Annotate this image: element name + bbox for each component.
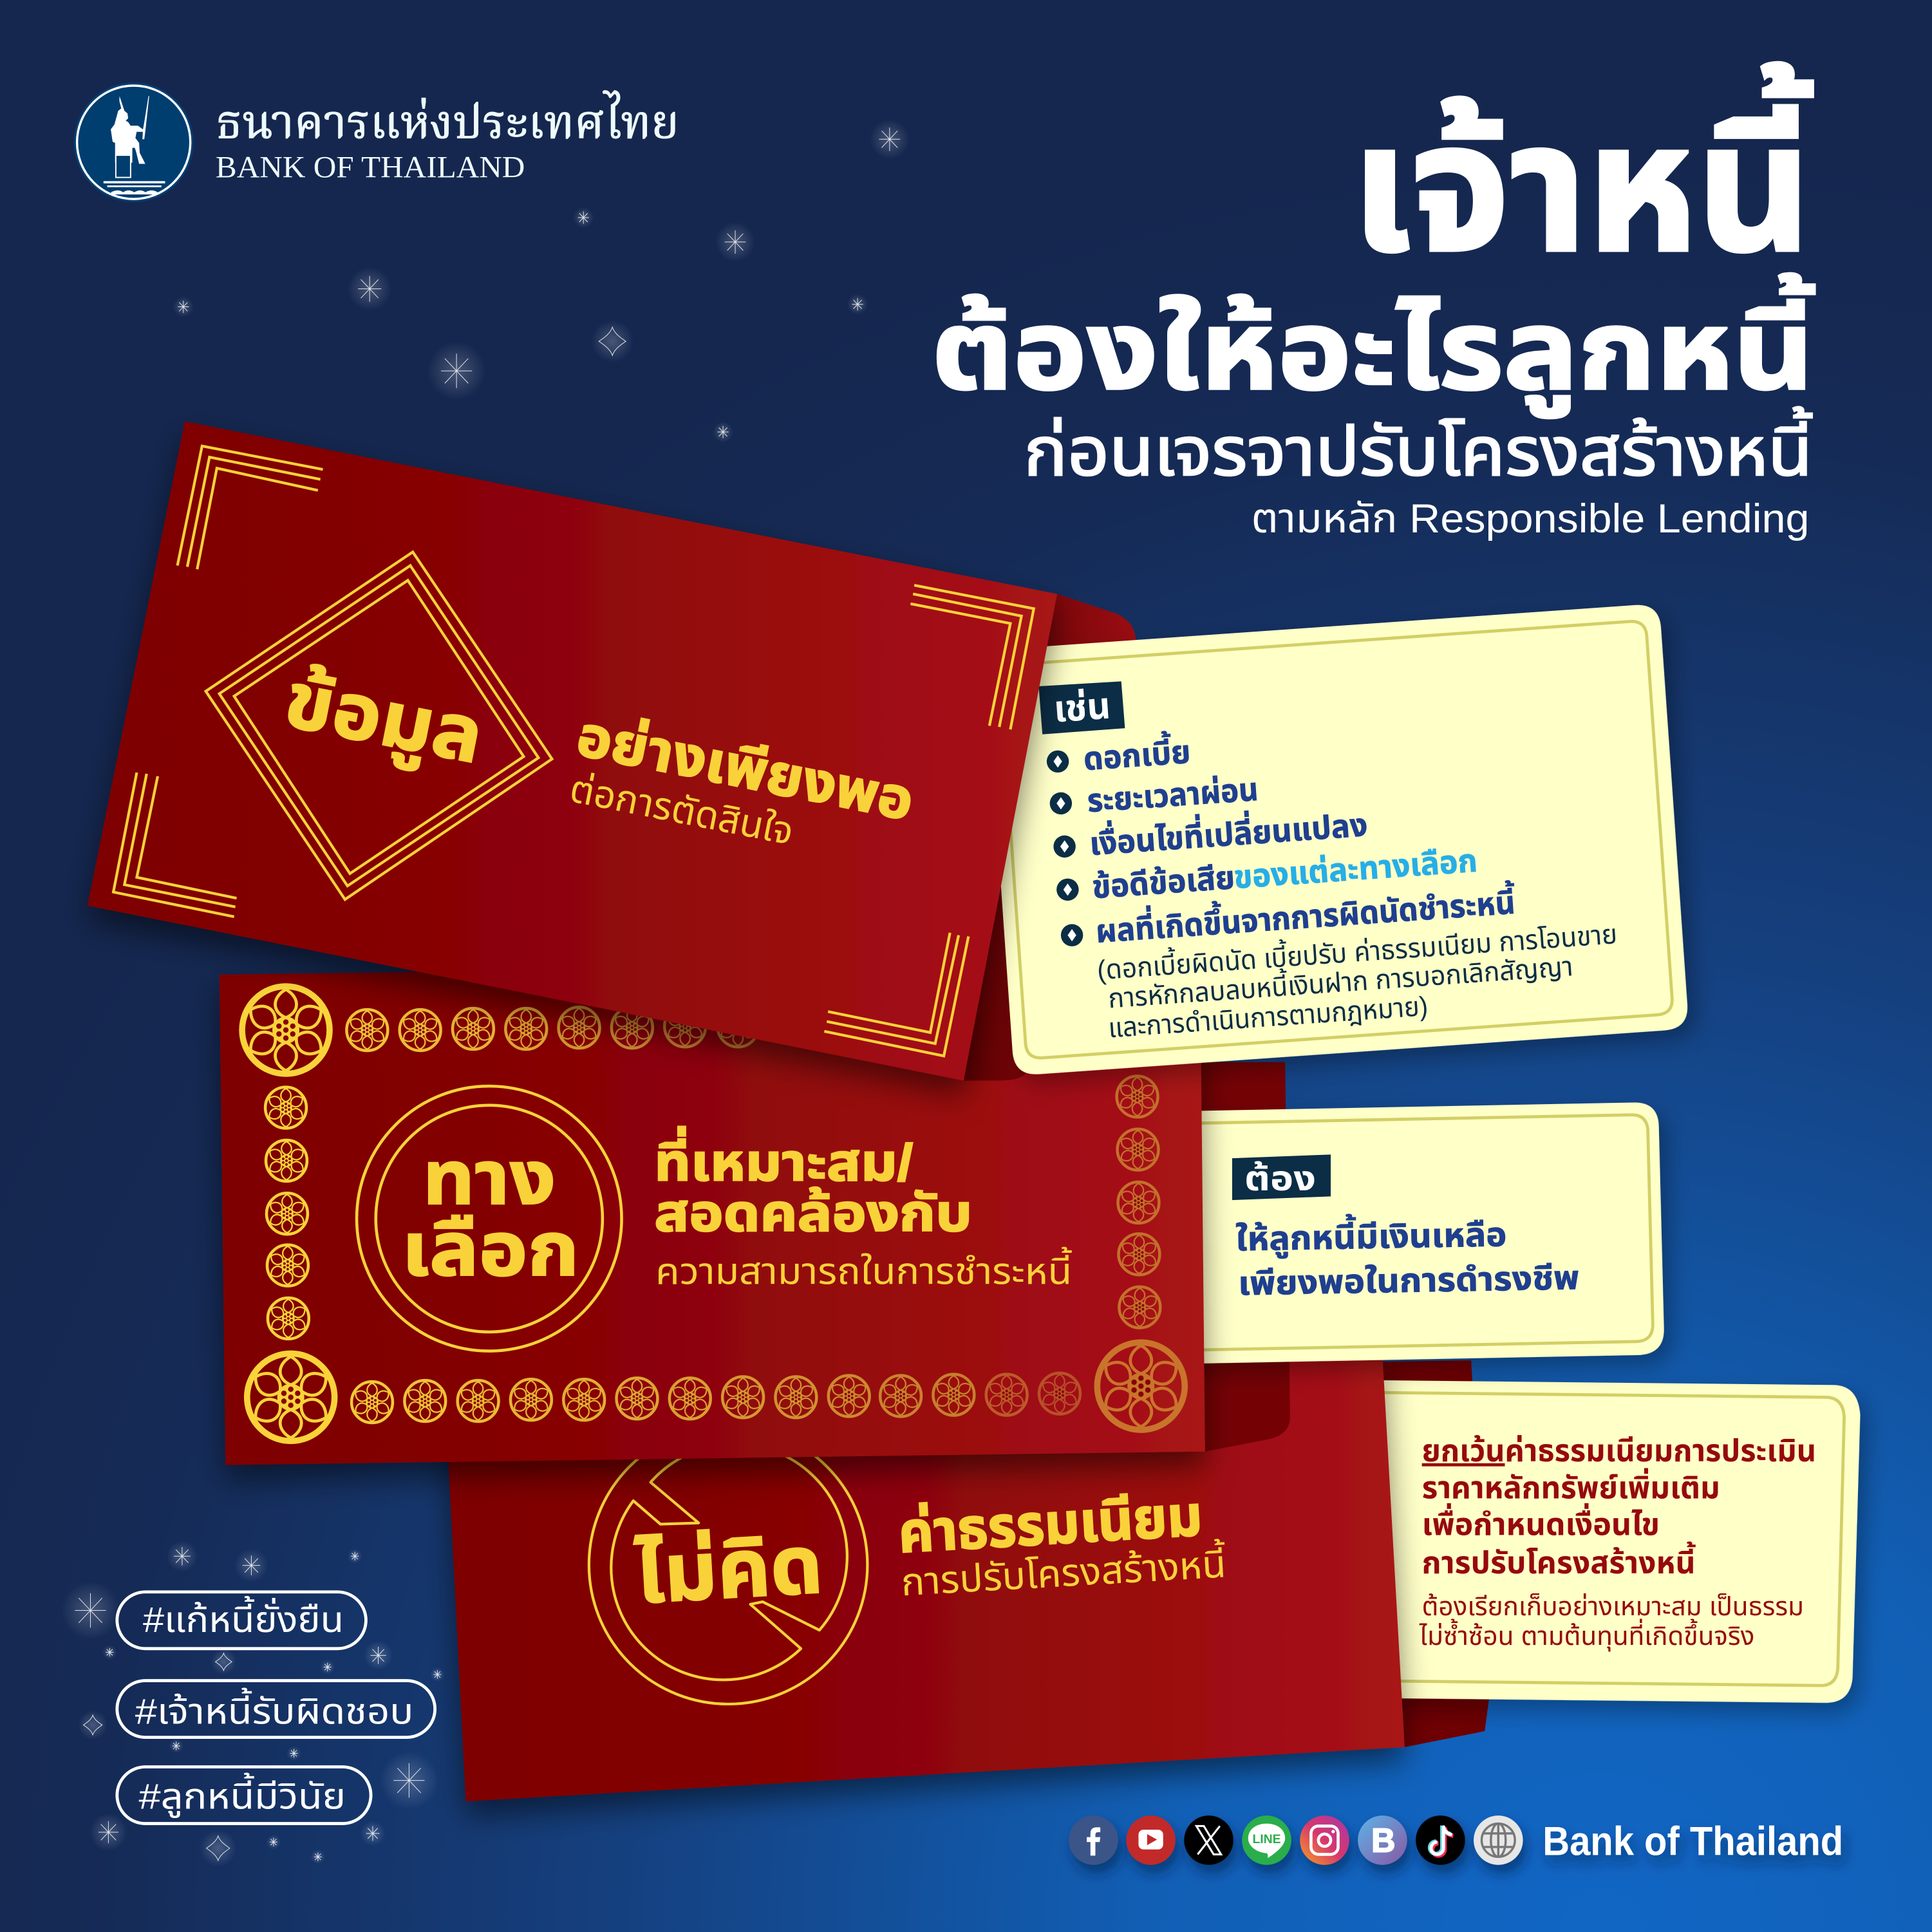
envelope 2 wording: เลือก (402, 1207, 579, 1291)
envelope 1 wording (277, 655, 919, 853)
card 3 text: ไม่ซ้ำซ้อน ตามต้นทุนที่เกิดขึ้นจริง (1419, 1618, 1754, 1652)
icon: tiktok (1416, 1815, 1465, 1865)
corner brackets (113, 446, 1034, 1056)
logo wordmark: BANK OF THAILAND (216, 151, 525, 185)
envelope 3 wording: ไม่คิด (633, 1519, 825, 1620)
default consequences note: (ดอกเบี้ยผิดนัด เบี้ยปรับ ค่าธรรมเนียม การโอนขาย (1096, 915, 1618, 986)
icon: website (1474, 1815, 1523, 1865)
prohibition badge (589, 1425, 867, 1704)
envelope 2 wording (402, 1126, 1072, 1292)
bullets (1047, 751, 1083, 946)
social media row (1069, 1815, 1843, 1865)
envelope 3: no fee (446, 1355, 1405, 1801)
icon: LINE: LINE (1252, 1833, 1281, 1846)
requirement lines (1235, 1211, 1580, 1302)
example list: เงื่อนไขที่เปลี่ยนแปลง (1088, 802, 1369, 862)
pill: responsible creditor (117, 1681, 435, 1738)
envelope 2 wording: สอดคล้องกับ (654, 1185, 972, 1243)
default consequences note: การหักกลบลบหนี้เงินฝาก การบอกเลิกสัญญา (1107, 948, 1574, 1014)
example list (1082, 729, 1517, 950)
requirement lines: เพียงพอในการดำรงชีพ (1238, 1259, 1580, 1302)
envelope 3 flap (1382, 1360, 1490, 1747)
envelope 2 wording: ทาง (422, 1136, 556, 1220)
tag: must: ต้อง (1244, 1159, 1316, 1198)
envelope 3 wording: การปรับโครงสร้างหนี้ (900, 1539, 1227, 1604)
icon: X (1184, 1815, 1233, 1865)
icon: youtube (1126, 1815, 1176, 1865)
logo wordmark: ธนาคารแห่งประเทศไทย (216, 89, 679, 148)
example list: ของแต่ละทางเลือก (1233, 843, 1479, 896)
card 3 text: ยกเว้นค่าธรรมเนียมการประเมิน (1422, 1434, 1816, 1468)
envelope 2 wording: ความสามารถในการชำระหนี้ (655, 1246, 1072, 1292)
diamond frame (206, 552, 552, 899)
card 3 text: การปรับโครงสร้างหนี้ (1422, 1541, 1696, 1580)
icon: blog: B (1371, 1822, 1395, 1859)
example list: ผลที่เกิดขึ้นจากการผิดนัดชำระหนี้ (1094, 879, 1517, 950)
pill: sustainable debt resolution (117, 1592, 366, 1649)
card 1: examples (984, 603, 1689, 1076)
card 3: exception note (1352, 1380, 1861, 1703)
envelope 2 wording: ที่เหมาะสม/ (654, 1126, 913, 1192)
logo wordmark (216, 89, 679, 185)
example list: ระยะเวลาผ่อน (1086, 771, 1259, 819)
card 3 text: เพื่อกำหนดเงื่อนไข (1422, 1503, 1660, 1543)
brand name: Bank of Thailand (1543, 1819, 1843, 1864)
pill: disciplined debtor: #ลูกหนี้มีวินัย (139, 1773, 346, 1819)
card 2: must leave enough (1170, 1102, 1664, 1364)
title block: ตามหลัก Responsible Lending (1252, 496, 1810, 541)
icon: blog (1358, 1815, 1407, 1865)
card 1 text (1038, 681, 1618, 1043)
sparkles: top sky (173, 119, 910, 442)
example list: ข้อดีข้อเสีย (1091, 859, 1236, 905)
envelope 1 wording: อย่างเพียงพอ (572, 704, 919, 832)
requirement lines: ให้ลูกหนี้มีเงินเหลือ (1235, 1211, 1507, 1260)
default consequences note (1096, 915, 1618, 1043)
card 2 text (1232, 1154, 1580, 1302)
pill: sustainable debt resolution: #แก้หนี้ยั่งยืน (143, 1596, 344, 1640)
envelope 2 flap (1200, 1062, 1290, 1452)
title block: เจ้าหนี้ (1352, 61, 1814, 289)
default consequences note: และการดำเนินการตามกฎหมาย) (1107, 991, 1429, 1043)
flower border (242, 986, 1185, 1441)
hashtag pills (117, 1592, 435, 1824)
icon: instagram (1300, 1815, 1349, 1865)
icon: facebook (1069, 1815, 1118, 1865)
envelope 1 wording: ข้อมูล (277, 655, 491, 783)
envelope 2: suitable options (220, 961, 1205, 1465)
logo: Bank of Thailand seal (74, 82, 193, 202)
pill: responsible creditor: #เจ้าหนี้รับผิดชอบ (135, 1688, 413, 1732)
tag: must (1232, 1154, 1331, 1200)
card 3 text: ราคาหลักทรัพย์เพิ่มเติม (1422, 1468, 1720, 1505)
icon: LINE (1242, 1815, 1291, 1865)
tag: for example (1038, 681, 1125, 735)
option badge rings (357, 1086, 622, 1351)
tag: for example: เช่น (1053, 686, 1112, 731)
card 3 text (1419, 1434, 1816, 1652)
pill: disciplined debtor (117, 1767, 371, 1824)
sparkles: hashtag area (61, 1541, 445, 1867)
example list: ดอกเบี้ย (1082, 729, 1192, 777)
envelope 1 wording: ต่อการตัดสินใจ (567, 767, 797, 853)
envelope 3 wording: ค่าธรรมเนียม (897, 1483, 1204, 1564)
title block: ต้องให้อะไรลูกหนี้ (932, 273, 1815, 418)
envelope 1 flap (964, 594, 1136, 1080)
envelope 1: sufficient information (88, 422, 1057, 1080)
envelope 3 wording (633, 1483, 1227, 1620)
title block (932, 61, 1815, 541)
card 3 text: ต้องเรียกเก็บอย่างเหมาะสม เป็นธรรม (1422, 1592, 1804, 1621)
title block: ก่อนเจรจาปรับโครงสร้างหนี้ (1024, 406, 1812, 490)
